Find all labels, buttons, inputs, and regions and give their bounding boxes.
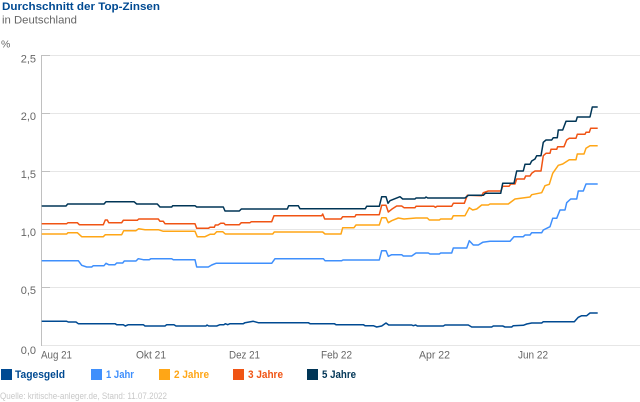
y axis unit: % — [1, 38, 10, 50]
subtitle: in Deutschland — [2, 14, 77, 26]
line: 2 Jahre — [42, 146, 598, 237]
legend item: 2 Jahre — [159, 369, 209, 381]
x axis labels: Jun 22 — [518, 350, 548, 362]
legend item: 3 Jahre: 3 Jahre — [248, 369, 283, 381]
x axis labels — [41, 350, 548, 362]
x axis labels: Okt 21 — [136, 350, 166, 362]
x axis labels: Apr 22 — [419, 350, 450, 362]
legend item: 5 Jahre — [307, 369, 356, 381]
source note: Quelle: kritische-anleger.de, Stand: 11.07.2022 — [0, 391, 167, 401]
title: Durchschnitt der Top-Zinsen — [2, 1, 160, 13]
x axis labels: Dez 21 — [229, 350, 260, 362]
legend — [1, 369, 356, 381]
line: 3 Jahre — [42, 128, 598, 228]
x axis labels: Feb 22 — [321, 350, 352, 362]
y axis labels: 1,0 — [21, 227, 36, 239]
y axis labels: 2,5 — [21, 54, 36, 66]
legend item: 1 Jahr: 1 Jahr — [106, 369, 135, 381]
legend item: 3 Jahre — [233, 369, 283, 381]
legend item: 1 Jahr — [91, 369, 135, 381]
legend item: Tagesgeld: Tagesgeld — [15, 369, 65, 381]
x axis labels: Aug 21 — [41, 350, 72, 362]
y axis labels: 1,5 — [21, 169, 36, 181]
legend item: 5 Jahre: 5 Jahre — [322, 369, 356, 381]
y axis labels: 2,0 — [21, 111, 36, 123]
y axis labels: 0,5 — [21, 285, 36, 297]
line: 1 Jahr — [42, 184, 598, 267]
y axis labels — [21, 54, 36, 357]
legend item: 2 Jahre: 2 Jahre — [174, 369, 209, 381]
line: 5 Jahre — [42, 107, 598, 211]
line: Tagesgeld — [42, 313, 598, 327]
y axis labels: 0,0 — [21, 345, 36, 357]
